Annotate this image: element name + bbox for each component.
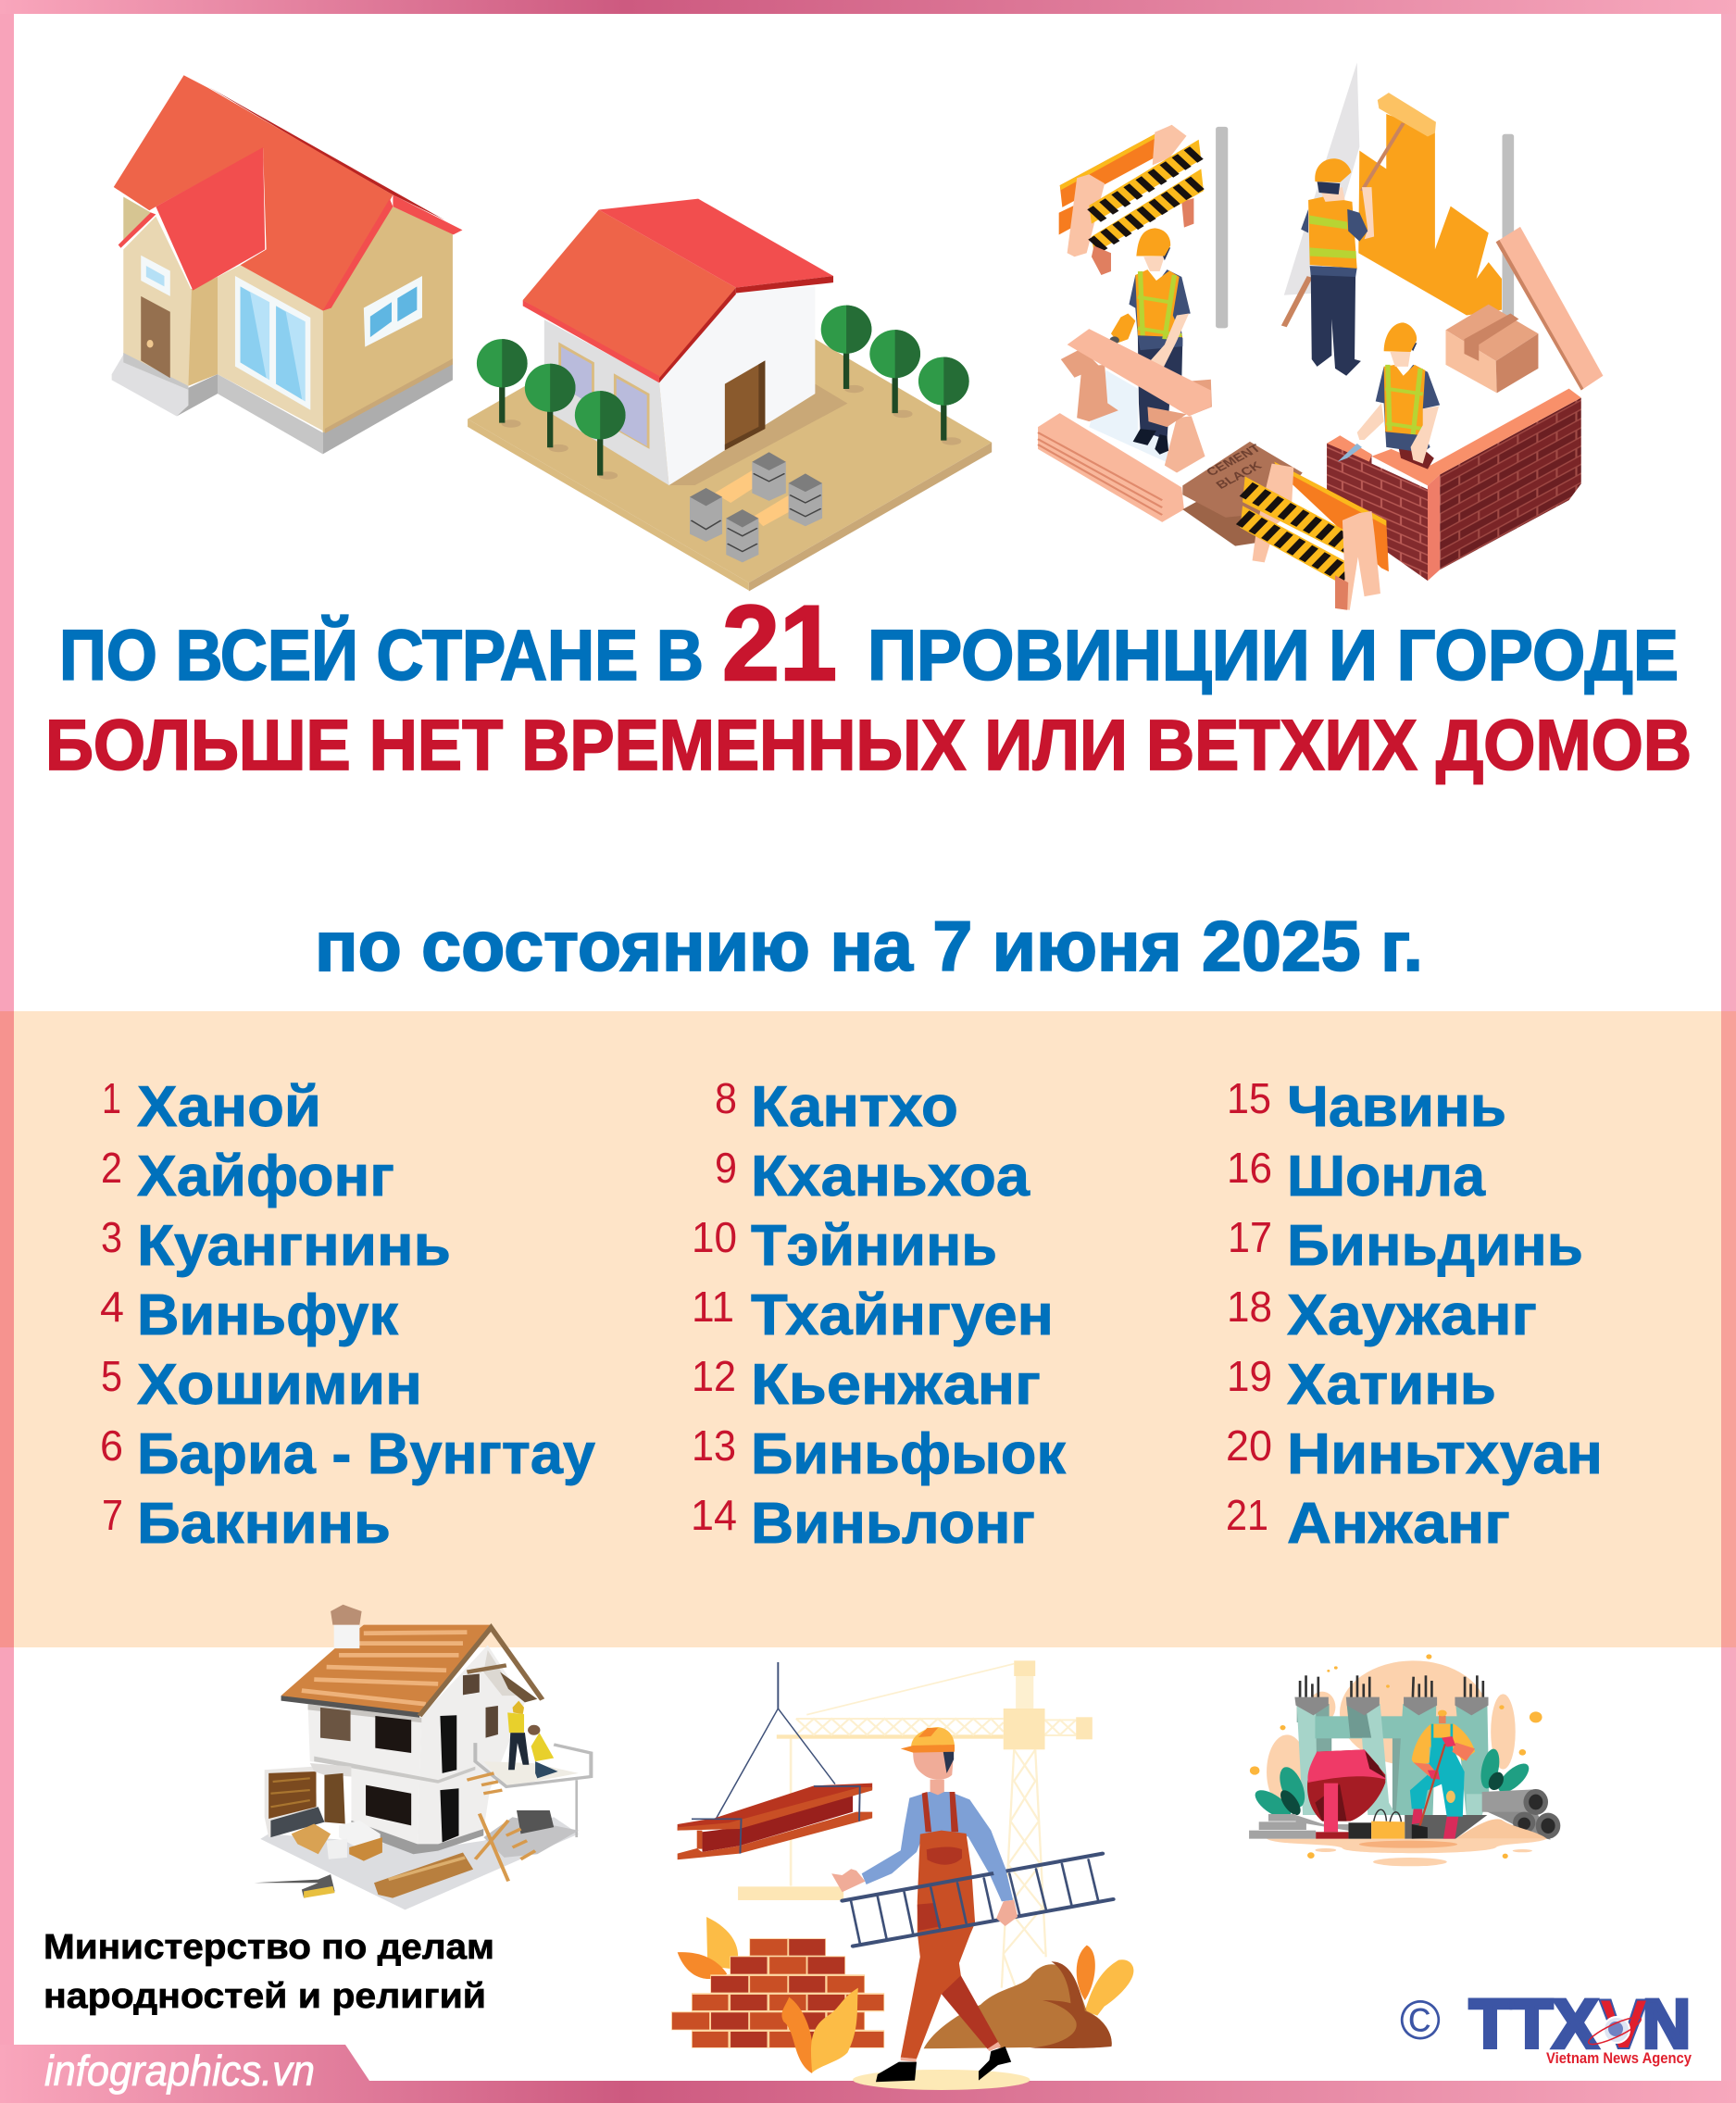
cement bags bbox=[1182, 441, 1303, 546]
list column 3 bbox=[1226, 1074, 1603, 1556]
stone gate posts and planks bbox=[690, 452, 822, 562]
dark platform and sand bbox=[1405, 1815, 1547, 1839]
list column 2: Кантхо bbox=[751, 1075, 958, 1139]
copyright mark: © bbox=[1400, 1989, 1441, 2051]
worker at sawhorse bbox=[1109, 228, 1191, 455]
peach background blobs bbox=[1267, 1660, 1547, 1866]
source tab: infographics.vn bbox=[0, 2045, 369, 2103]
big number 21: 21 bbox=[722, 584, 837, 703]
letter V: V bbox=[1599, 1985, 1648, 2064]
list column 2: Кьенжанг bbox=[751, 1353, 1041, 1417]
sawhorse table bbox=[1061, 329, 1212, 473]
ground shadow bbox=[853, 2070, 1030, 2090]
list column 1: 2 bbox=[101, 1144, 122, 1192]
painter worker bbox=[1301, 158, 1374, 376]
list column 3: Биньдинь bbox=[1287, 1214, 1583, 1278]
cement bags: CEMENT bbox=[1203, 441, 1264, 479]
list column 1: 6 bbox=[100, 1421, 123, 1470]
worker with shovel bbox=[1410, 1710, 1475, 1839]
workers on scaffold bbox=[507, 1701, 558, 1778]
list column 2: Кханьхоа bbox=[751, 1145, 1030, 1208]
title line 1 start: ПО ВСЕЙ СТРАНЕ В bbox=[59, 614, 704, 695]
pipes bbox=[1482, 1789, 1560, 1840]
cement bags: BLACK bbox=[1213, 458, 1265, 491]
brick pile with leaves bbox=[671, 1917, 884, 2073]
list column 3: Шонла bbox=[1287, 1145, 1486, 1208]
illustration: worker carrying ladder bbox=[671, 1660, 1133, 2090]
barricade bottom bbox=[1240, 462, 1389, 610]
date subtitle: по состоянию на 7 июня 2025 г. bbox=[315, 908, 1423, 986]
list column 3: 21 bbox=[1226, 1491, 1268, 1539]
list column 2: Тэйнинь bbox=[751, 1214, 997, 1278]
list column 1: Куангнинь bbox=[137, 1214, 451, 1278]
list column 3: 15 bbox=[1227, 1074, 1271, 1122]
source text: ministry: народностей и религий bbox=[44, 1977, 486, 2016]
building materials bbox=[255, 1821, 473, 1898]
icon: white house with trees on a plot bbox=[468, 199, 992, 592]
list column 2: Тхайнгуен bbox=[751, 1283, 1054, 1347]
list column 2: 11 bbox=[692, 1283, 734, 1331]
list column 3: Анжанг bbox=[1287, 1492, 1510, 1556]
trees group bbox=[477, 306, 969, 480]
list column 3: Ниньтхуан bbox=[1287, 1422, 1603, 1486]
list column 1: 5 bbox=[101, 1352, 122, 1400]
decorative dots bbox=[1250, 1654, 1542, 1859]
list column 3: Хатинь bbox=[1287, 1353, 1496, 1417]
worker figure bbox=[831, 1727, 1013, 2082]
list column 1: Ханой bbox=[137, 1075, 321, 1139]
ladder bbox=[843, 1854, 1113, 1947]
list column 1: Бакнинь bbox=[137, 1492, 391, 1556]
bricklayer worker bbox=[1338, 322, 1440, 469]
leaning plank bbox=[1496, 227, 1603, 391]
list column 2: Биньфыок bbox=[751, 1422, 1067, 1486]
brick wall bbox=[1327, 389, 1581, 581]
cement mixer bbox=[1307, 1749, 1386, 1839]
list column 3: Чавинь bbox=[1287, 1075, 1506, 1139]
title line 1 end: ПРОВИНЦИИ И ГОРОДЕ bbox=[868, 616, 1679, 695]
illustration: concrete pillars worker bbox=[1249, 1654, 1560, 1866]
steel beam on ropes bbox=[678, 1662, 872, 1859]
scaffold and ladder bbox=[467, 1743, 591, 1881]
list column 3: 17 bbox=[1228, 1213, 1272, 1261]
letters TTX: TTX bbox=[1469, 1985, 1598, 2062]
yellow bags bbox=[1371, 1809, 1405, 1839]
list column 1: Бариа - Вунгтау bbox=[137, 1422, 596, 1486]
list column 3: 19 bbox=[1227, 1352, 1272, 1400]
list column 2: 14 bbox=[691, 1491, 737, 1539]
icon: two-storey beige house bbox=[112, 75, 462, 454]
source text: ministry: Министерство по делам bbox=[44, 1928, 494, 1967]
chimney bbox=[331, 1605, 362, 1648]
title bbox=[45, 584, 1692, 785]
list column 1: 3 bbox=[101, 1213, 122, 1261]
illustration: house under renovation bbox=[255, 1605, 591, 1909]
illustration: construction site workers bbox=[1038, 63, 1603, 610]
globe and orbit bbox=[1586, 2013, 1643, 2048]
list column 1: Хошимин bbox=[137, 1353, 422, 1417]
list column 2: 8 bbox=[715, 1074, 737, 1122]
list column 2: 13 bbox=[692, 1421, 736, 1470]
barricade top bbox=[1059, 125, 1204, 275]
list column 2: 10 bbox=[692, 1213, 737, 1261]
letter N: N bbox=[1642, 1985, 1691, 2062]
list column 2: 9 bbox=[715, 1144, 737, 1192]
list column 1 bbox=[100, 1074, 596, 1556]
leaves bbox=[1250, 1747, 1534, 1823]
list column 2 bbox=[691, 1074, 1067, 1556]
list column 3: 18 bbox=[1227, 1283, 1272, 1331]
logo: TTXVN Vietnam News Agency bbox=[1400, 1985, 1692, 2067]
source text: ministry bbox=[44, 1928, 494, 2016]
panel: peach list band bbox=[0, 1011, 1736, 1647]
list column 1: 1 bbox=[102, 1074, 121, 1122]
forearm and hand over ladder bbox=[991, 1864, 1018, 1926]
source tab: infographics.vn: infographics.vn bbox=[44, 2047, 315, 2095]
list column 3: Хаужанг bbox=[1287, 1283, 1537, 1347]
crane bbox=[738, 1660, 1093, 1988]
list column 2: 12 bbox=[692, 1352, 736, 1400]
list column 1: 7 bbox=[102, 1491, 123, 1539]
list column 1: Хайфонг bbox=[137, 1145, 394, 1208]
list column 2: Виньлонг bbox=[751, 1492, 1035, 1556]
plank stack bbox=[1038, 413, 1184, 522]
cardboard box bbox=[1445, 305, 1538, 393]
paint roller bbox=[1284, 93, 1436, 326]
roof bbox=[281, 1625, 543, 1718]
list column 3: 20 bbox=[1226, 1421, 1272, 1470]
concrete columns bbox=[1294, 1675, 1489, 1815]
floor patch bbox=[1089, 370, 1181, 469]
list column 1: 4 bbox=[100, 1283, 124, 1331]
list column 3: 16 bbox=[1227, 1144, 1272, 1192]
agency name: Vietnam News Agency bbox=[1546, 2049, 1692, 2067]
sand mound and plants bbox=[924, 1946, 1133, 2048]
list column 1: Виньфук bbox=[137, 1283, 399, 1347]
grey pavers bbox=[1249, 1814, 1350, 1839]
